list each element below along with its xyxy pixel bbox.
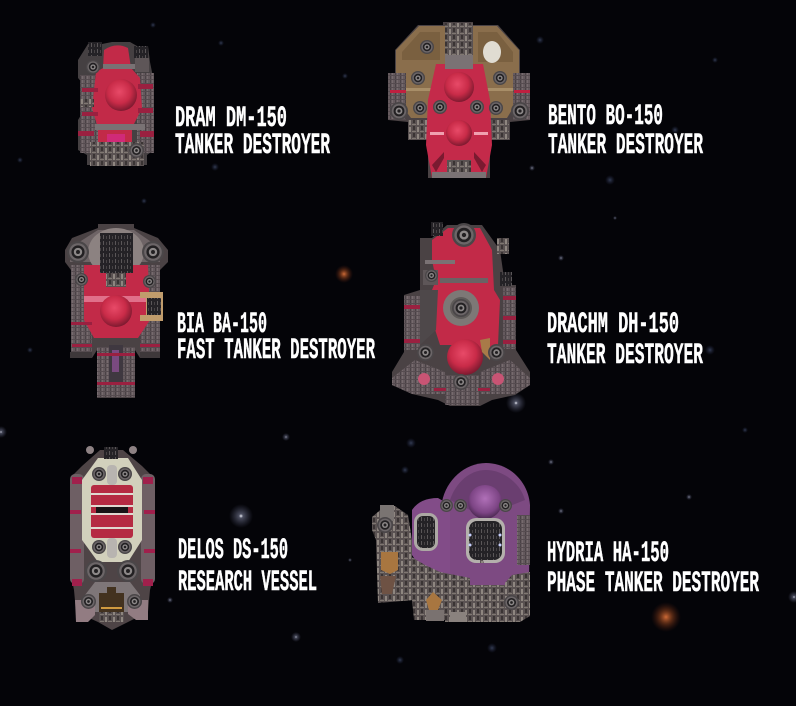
label: Dram	[175, 102, 330, 163]
ship: Bia	[65, 224, 168, 398]
label: Hydria	[547, 537, 759, 601]
label: Dram: TANKER DESTROYER	[175, 129, 330, 163]
label: Drachm: DRACHM DH-150	[547, 308, 679, 342]
label: Bento: BENTO BO-150	[548, 100, 663, 134]
ship: Hydria	[372, 463, 530, 622]
label: Dram: DRAM DM-150	[175, 102, 287, 136]
ship: Drachm	[392, 222, 530, 406]
label: Bia: BIA BA-150	[177, 308, 267, 342]
label: Drachm	[547, 308, 703, 373]
ship: Dram	[78, 42, 154, 166]
label: Delos: DELOS DS-150	[178, 534, 288, 568]
label: Delos	[178, 534, 317, 600]
label: Bento	[548, 100, 703, 163]
label: Bia	[177, 308, 375, 368]
ship: Bento	[388, 22, 530, 178]
label: Bia: FAST TANKER DESTROYER	[177, 334, 375, 368]
ship: Delos	[70, 446, 155, 630]
label: Hydria: HYDRIA HA-150	[547, 537, 669, 571]
label: Delos: RESEARCH VESSEL	[178, 566, 317, 600]
